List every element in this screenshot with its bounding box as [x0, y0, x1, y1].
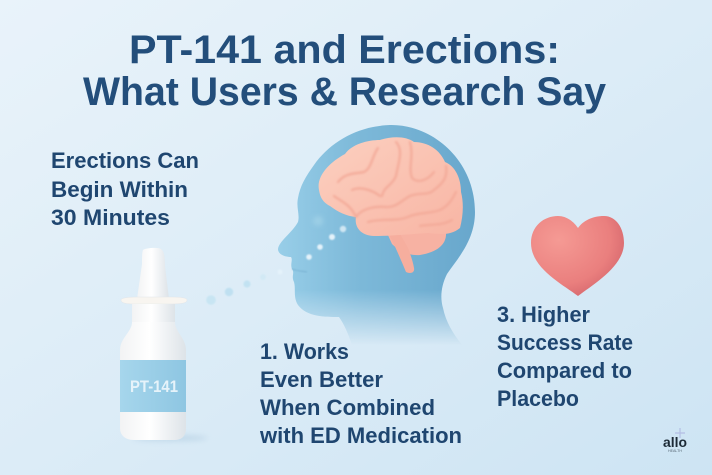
- text: works better with ED medication: When Combined: [260, 395, 435, 420]
- text: erections can begin within 30 minutes: Erections Can: [51, 148, 199, 173]
- face detail: [314, 216, 323, 226]
- nasal spray bottle: [120, 248, 208, 441]
- text: higher success rate compared to placebo: Success Rate: [497, 330, 633, 355]
- text: higher success rate compared to placebo: 3. Higher: [497, 302, 590, 327]
- text: erections can begin within 30 minutes: Begin Within: [51, 177, 188, 202]
- label band: [120, 360, 186, 412]
- title: [83, 28, 606, 114]
- collar: [121, 297, 187, 304]
- text: works better with ED medication: [259, 339, 462, 448]
- icon: heart: [531, 216, 624, 296]
- text: higher success rate compared to placebo: Compared to: [497, 358, 632, 383]
- text: works better with ED medication: Even Better: [260, 367, 383, 392]
- nozzle: [137, 248, 169, 299]
- head silhouette: [278, 125, 475, 345]
- text: works better with ED medication: with ED Medication: [259, 423, 462, 448]
- logo: allo health: allo: [663, 434, 687, 450]
- title: PT-141 and Erections:: [129, 28, 560, 72]
- text: higher success rate compared to placebo: [497, 302, 633, 411]
- brain: [319, 137, 463, 273]
- label text: PT-141: [130, 378, 178, 396]
- text: higher success rate compared to placebo: Placebo: [497, 386, 579, 411]
- logo: allo health: [663, 428, 687, 453]
- logo: allo health: HEALTH: [668, 449, 682, 453]
- text: erections can begin within 30 minutes: [51, 148, 199, 230]
- text: works better with ED medication: 1. Works: [260, 339, 349, 364]
- text: erections can begin within 30 minutes: 30 Minutes: [51, 205, 170, 230]
- title: What Users & Research Say: [83, 70, 606, 114]
- spray droplets: [206, 226, 346, 305]
- illustration: head profile with brain: [278, 125, 475, 345]
- bottle body: [120, 322, 186, 440]
